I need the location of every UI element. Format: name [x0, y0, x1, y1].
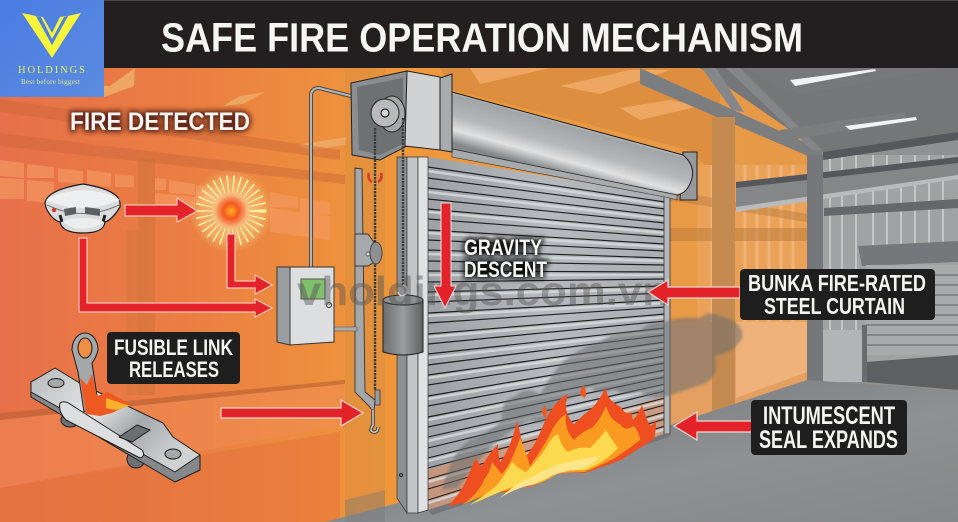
label: gravity descent: GRAVITY	[464, 235, 542, 260]
chains	[368, 118, 403, 390]
label: gravity descent: DESCENT	[464, 257, 547, 282]
arrow: curtain callout	[648, 280, 740, 305]
label: gravity descent	[464, 235, 547, 282]
arrow: detector to panel	[79, 238, 272, 317]
floor	[325, 380, 958, 522]
callout: fusible link releases	[107, 332, 240, 384]
logo: V Holdings	[0, 0, 104, 97]
flames	[448, 385, 656, 506]
roller housing	[452, 92, 697, 200]
callout: fusible link releases: RELEASES	[129, 357, 219, 382]
release lever with hook	[355, 168, 382, 432]
callout: fusible link releases: FUSIBLE LINK	[114, 335, 233, 360]
control panel box	[277, 267, 357, 345]
callout: intumescent seal expands	[751, 400, 907, 455]
alarm burst icon	[189, 169, 273, 253]
diagonal roof truss	[640, 68, 945, 162]
control conduit pipe	[311, 88, 351, 267]
arrow: link to hook	[221, 400, 363, 426]
label: gravity descent: GRAVITY	[464, 235, 542, 260]
icon: fusible link	[31, 333, 200, 482]
label: fire detected: FIRE DETECTED	[70, 108, 250, 136]
callout: bunka fire-rated steel curtain: STEEL CURTAIN	[764, 293, 905, 319]
callout: bunka fire-rated steel curtain	[740, 269, 935, 320]
counterweight	[383, 285, 423, 355]
logo: V Holdings: Best before biggest	[21, 78, 80, 86]
title bar	[0, 0, 958, 68]
arrow: gravity descent	[434, 203, 456, 308]
logo: V Holdings: HOLDINGS	[18, 65, 85, 76]
arrow: detector to burst	[125, 198, 197, 222]
gray warehouse right side	[640, 68, 958, 416]
ceiling lights	[790, 69, 917, 130]
watermark: vholdings.com.vn	[297, 268, 669, 314]
steel curtain	[428, 157, 670, 515]
arrow: seal callout	[674, 412, 752, 440]
side guide rail	[397, 157, 428, 513]
callout: intumescent seal expands: SEAL EXPANDS	[759, 426, 898, 454]
callout: intumescent seal expands: INTUMESCENT	[763, 402, 895, 430]
title: SAFE FIRE OPERATION MECHANISM	[161, 14, 803, 60]
label: gravity descent: DESCENT	[464, 257, 547, 282]
smoke	[442, 313, 742, 490]
translucent column	[712, 117, 735, 416]
smoke detector icon	[45, 184, 120, 233]
arrow: burst to panel	[227, 234, 272, 294]
roller door in background	[823, 241, 958, 390]
head box with pulley	[351, 71, 452, 160]
label: fire detected: FIRE DETECTED	[70, 108, 250, 136]
